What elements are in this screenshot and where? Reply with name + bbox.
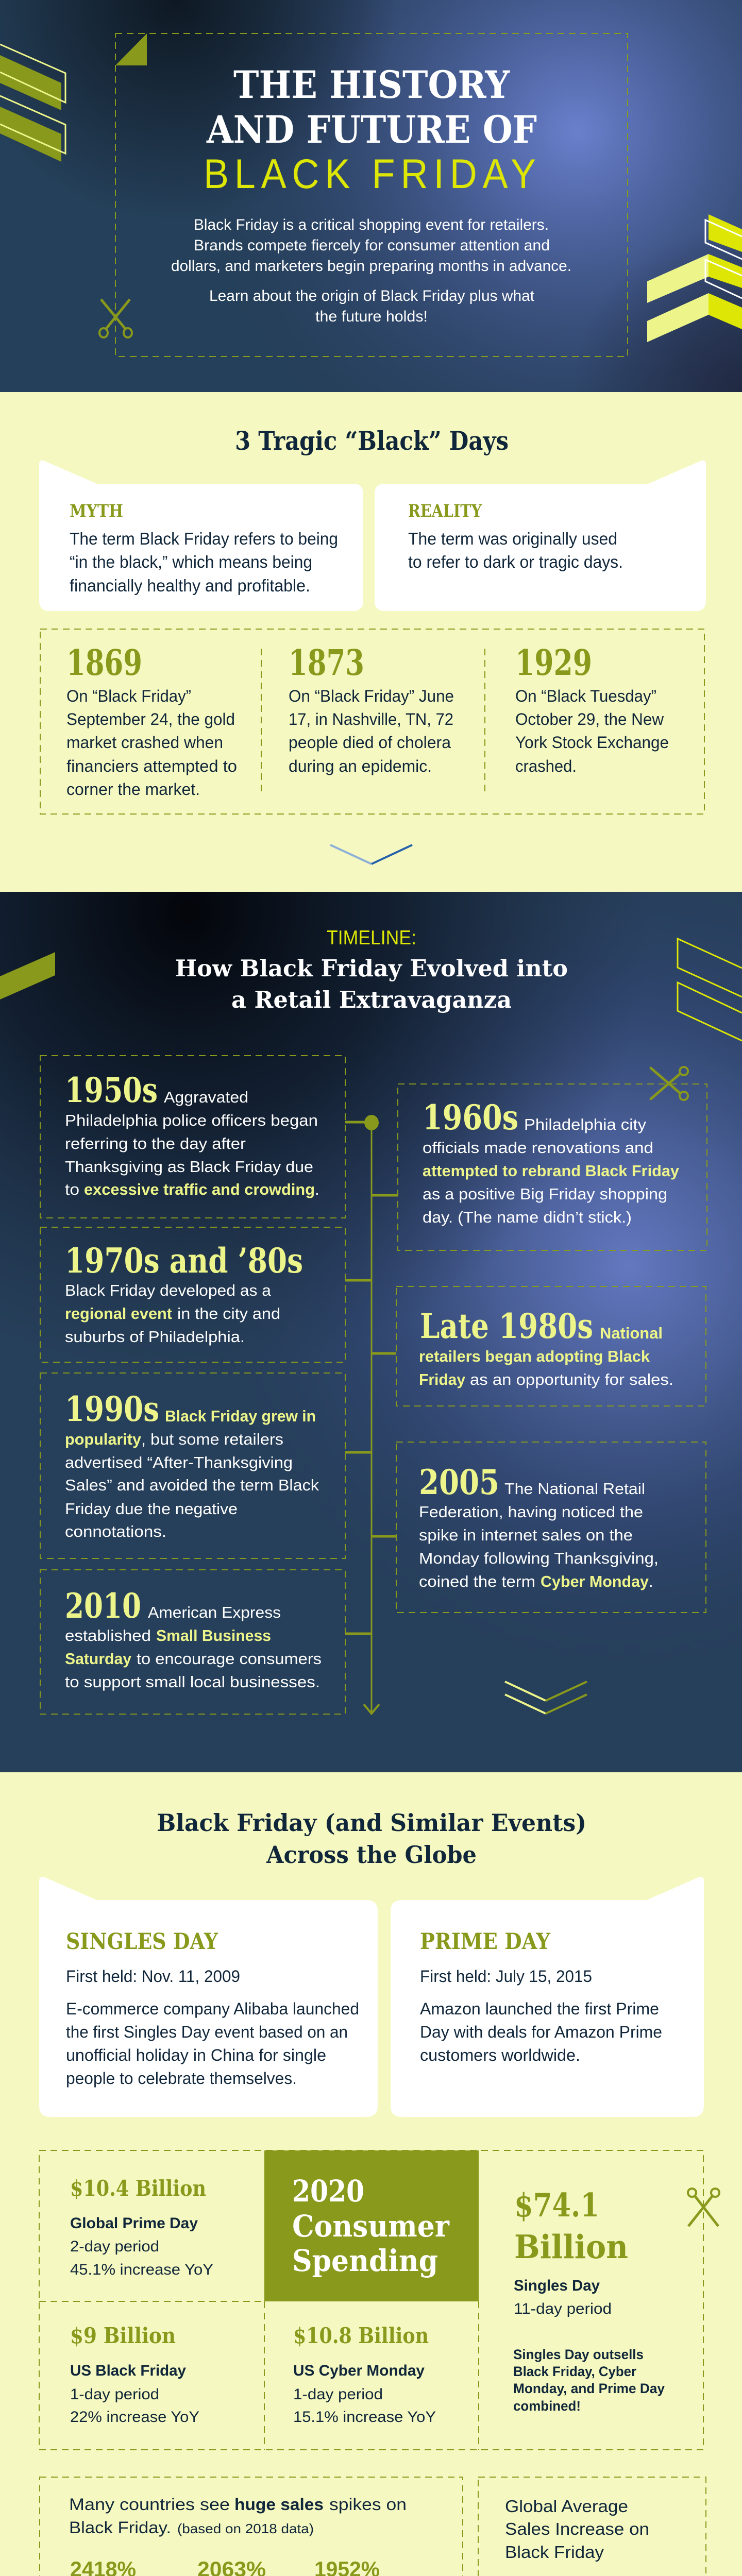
card: myth: financially healthy and profitable. (70, 576, 310, 595)
event: 1960s: Philadelphia city (524, 1115, 647, 1133)
country intro text: huge sales (234, 2495, 324, 2514)
event: late 1980s (396, 1286, 706, 1406)
event: 2010: to support small local businesses. (65, 1673, 320, 1691)
event: 1960s: 1960s (423, 1097, 518, 1138)
event: 1950s (40, 1056, 345, 1218)
title (204, 63, 542, 197)
card: prime day: Amazon launched the first Prime (420, 1999, 659, 2018)
event: 1970s and 80s: Black Friday developed as a (65, 1281, 272, 1299)
event: 1950s: . (315, 1180, 319, 1198)
card: reality: REALITY (408, 501, 482, 521)
chevrons: timeline right (678, 939, 742, 1041)
event: 1960s: attempted to rebrand Black Friday (423, 1162, 680, 1180)
event: late 1980s: retailers began adopting Black (419, 1347, 650, 1365)
card: singles day: people to celebrate themselves. (66, 2069, 297, 2088)
heading: across the globe (157, 1809, 586, 1869)
stat: singles day: Singles Day outsells (513, 2347, 644, 2362)
card: singles day: SINGLES DAY (66, 1929, 218, 1955)
stat: singles day: $74.1 (514, 2186, 599, 2224)
event: 1990s: Black Friday grew in (165, 1407, 316, 1425)
event: 1970s and 80s (40, 1227, 345, 1362)
event: 1950s: referring to the day after (65, 1134, 246, 1153)
event: 2010: 2010 (65, 1586, 141, 1626)
event: 1970s and 80s: in the city and (177, 1304, 280, 1323)
card: myth: MYTH (70, 501, 123, 521)
card: myth: The term Black Friday refers to being (70, 529, 338, 548)
dashed frame: consumer spending (39, 2150, 703, 2450)
card: reality: The term was originally used (408, 529, 617, 548)
stat: us cyber monday: $10.8 Billion (293, 2323, 429, 2348)
icon: scissors timeline (651, 1067, 688, 1100)
stat: us black friday: 1-day period (70, 2386, 159, 2403)
panel: global average: Black Friday (505, 2543, 604, 2562)
stat: global prime day: Global Prime Day (70, 2215, 198, 2232)
stat: global prime day: 2-day period (70, 2238, 159, 2255)
year: 1929: On “Black Tuesday” (515, 687, 656, 705)
event: 2010: Saturday (65, 1650, 132, 1668)
panel: 3 tragic black days (0, 392, 742, 892)
event: 2005: The National Retail (504, 1480, 645, 1498)
event: 1970s and 80s: regional event (65, 1304, 172, 1323)
stat: us cyber monday: 1-day period (293, 2386, 383, 2403)
heading: timeline: TIMELINE: (327, 927, 416, 949)
year: 1873: On “Black Friday” June (289, 687, 454, 705)
event: late 1980s: National (600, 1324, 663, 1342)
event: 1990s (40, 1373, 345, 1558)
event: 2010: American Express (148, 1603, 281, 1621)
stat: singles day: 11-day period (514, 2300, 612, 2317)
stat: singles day: Billion (514, 2228, 628, 2266)
panel: country spikes (40, 2477, 463, 2576)
event: late 1980s: Friday (419, 1370, 466, 1388)
event: late 1980s: Late 1980s (420, 1306, 593, 1346)
panel: similar events (0, 1772, 742, 2576)
card: singles day: unofficial holiday in China for single (66, 2046, 326, 2064)
stat: us cyber monday: US Cyber Monday (293, 2362, 425, 2379)
block: 2020 consumer spending (264, 2150, 479, 2301)
event: 1990s: , but some retailers (141, 1430, 283, 1448)
event: 2005: spike in internet sales on the (419, 1526, 633, 1544)
corner fold (115, 33, 147, 65)
stat: global prime day (70, 2176, 213, 2278)
year: 1873 (289, 642, 454, 775)
year: 1869: On “Black Friday” (66, 687, 191, 705)
year: 1873: 1873 (289, 642, 364, 684)
dashed frame: years (40, 629, 704, 814)
heading: timeline: How Black Friday Evolved into (175, 955, 568, 982)
panel: timeline (0, 892, 742, 1772)
stat: singles day: Black Friday, Cyber (513, 2364, 636, 2379)
stat: us cyber monday: 15.1% increase YoY (293, 2409, 436, 2426)
year: 1869: financiers attempted to (66, 757, 237, 775)
event: 1990s: connotations. (65, 1522, 166, 1540)
event: 2010: established (65, 1626, 151, 1645)
card: singles day: First held: Nov. 11, 2009 (66, 1967, 240, 1986)
event: 1960s (398, 1084, 707, 1250)
arrow: chevron down (330, 845, 412, 864)
year: 1929: 1929 (515, 642, 592, 684)
event: 1970s and 80s: 1970s and ’80s (65, 1241, 303, 1281)
intro text: Black Friday is a critical shopping event for retailers. (194, 216, 549, 233)
stat: singles day: Singles Day (514, 2277, 600, 2294)
event: 2005: Monday following Thanksgiving, (419, 1549, 659, 1567)
icon: scissors (99, 299, 132, 337)
card: myth (39, 461, 363, 611)
event: 2010: to encourage consumers (137, 1650, 322, 1668)
event: 2005: coined the term (419, 1572, 535, 1590)
event: 2005: . (649, 1572, 653, 1590)
country intro text (69, 2495, 407, 2537)
year: 1929: York Stock Exchange (515, 733, 669, 752)
year: 1869: September 24, the gold (66, 710, 235, 728)
heading: timeline (175, 927, 568, 1013)
panel: global average: Global Average (505, 2497, 628, 2516)
event: 2010 (40, 1570, 345, 1714)
chevrons: hero left (0, 44, 65, 162)
panel: global average: Sales Increase on (505, 2519, 649, 2538)
arrow: double chevron (505, 1682, 587, 1714)
stat: global prime day: $10.4 Billion (70, 2176, 206, 2201)
title: THE HISTORY (233, 63, 510, 107)
card: prime day: Day with deals for Amazon Prime (420, 2023, 662, 2041)
stat: global prime day: 45.1% increase YoY (70, 2261, 213, 2278)
heading: 3 Tragic “Black” Days (235, 426, 509, 456)
intro text (171, 216, 571, 325)
card: singles day (39, 1877, 378, 2117)
country intro text: (based on 2018 data) (177, 2521, 314, 2536)
dashed frame: hero (115, 33, 628, 357)
icon: scissors stats (688, 2189, 719, 2226)
event: 2005: Federation, having noticed the (419, 1503, 643, 1521)
event: 1960s: as a positive Big Friday shopping (423, 1185, 667, 1203)
event: 1950s: 1950s (65, 1070, 158, 1110)
panel: hero (0, 0, 742, 392)
stat: singles day: combined! (513, 2398, 581, 2414)
heading: timeline: a Retail Extravaganza (231, 986, 512, 1013)
country intro text: Many countries see (69, 2495, 230, 2514)
stat: singles day (513, 2186, 665, 2414)
year: 1929: October 29, the New (515, 710, 664, 728)
year: 1869: corner the market. (66, 780, 200, 799)
event: 2005 (396, 1442, 706, 1613)
year: 1929: crashed. (515, 757, 577, 775)
card: reality (375, 461, 706, 611)
event: 1990s: popularity (65, 1430, 142, 1448)
block: 2020 consumer spending: Consumer (292, 2209, 450, 2244)
year: 1869: market crashed when (66, 733, 223, 752)
event: 1950s: Thanksgiving as Black Friday due (65, 1158, 313, 1176)
intro text: dollars, and marketers begin preparing months in advance. (171, 258, 571, 275)
intro text: Brands compete fiercely for consumer attention and (194, 237, 550, 254)
event: 1950s: to (65, 1180, 79, 1198)
block: 2020 consumer spending: 2020 (292, 2174, 364, 2209)
event: 1960s: officials made renovations and (423, 1139, 653, 1157)
heading: across the globe: Across the Globe (266, 1841, 477, 1869)
card: prime day: First held: July 15, 2015 (420, 1967, 592, 1986)
stat: us black friday: US Black Friday (70, 2362, 186, 2379)
event: 1990s: Friday due the negative (65, 1500, 238, 1518)
year: 1873: 17, in Nashville, TN, 72 (289, 710, 453, 728)
stat: us black friday (70, 2323, 199, 2426)
country intro text: Black Friday. (69, 2518, 171, 2537)
stat: us cyber monday (293, 2323, 436, 2426)
event: 2005: Cyber Monday (541, 1572, 649, 1590)
card: prime day: customers worldwide. (420, 2046, 580, 2064)
event: late 1980s: as an opportunity for sales. (470, 1370, 673, 1388)
intro text: Learn about the origin of Black Friday plus what (209, 287, 535, 304)
intro text: the future holds! (315, 308, 428, 325)
event: 1970s and 80s: suburbs of Philadelphia. (65, 1328, 245, 1346)
card: myth: “in the black,” which means being (70, 552, 312, 571)
title: AND FUTURE OF (206, 108, 537, 152)
title: BLACK FRIDAY (204, 151, 542, 197)
event: 1960s: day. (The name didn’t stick.) (423, 1208, 632, 1226)
event: 1950s: Aggravated (164, 1088, 248, 1106)
stat: us black friday: $9 Billion (70, 2323, 176, 2348)
card: prime day: PRIME DAY (420, 1929, 551, 1955)
year: 1929 (515, 642, 669, 775)
chevron: timeline left (0, 952, 55, 999)
event: 1990s: advertised “After-Thanksgiving (65, 1453, 293, 1471)
event: 2010: Small Business (156, 1626, 271, 1645)
event: 1950s: excessive traffic and crowding (84, 1180, 315, 1198)
event: 1990s: 1990s (65, 1389, 159, 1429)
block: 2020 consumer spending: Spending (292, 2243, 438, 2278)
stat: us black friday: 22% increase YoY (70, 2409, 199, 2426)
card: prime day (391, 1877, 704, 2117)
card: singles day: E-commerce company Alibaba launched (66, 1999, 359, 2018)
year: 1869: 1869 (66, 642, 142, 684)
event: 1990s: Sales” and avoided the term Black (65, 1476, 319, 1494)
stat: singles day: Monday, and Prime Day (513, 2381, 665, 2396)
chevrons: hero right (647, 214, 742, 342)
year: 1873: during an epidemic. (289, 757, 432, 775)
year: 1873: people died of cholera (289, 733, 451, 752)
event: 1950s: Philadelphia police officers began (65, 1111, 318, 1129)
country intro text: spikes on (329, 2495, 407, 2514)
event: 2005: 2005 (419, 1462, 499, 1502)
heading: across the globe: Black Friday (and Similar Events) (157, 1809, 586, 1837)
timeline axis (345, 1115, 398, 1714)
year: 1869 (66, 642, 237, 799)
card: singles day: the first Singles Day event based on an (66, 2023, 348, 2041)
card: reality: to refer to dark or tragic days. (408, 552, 623, 571)
panel: global average (478, 2477, 706, 2576)
